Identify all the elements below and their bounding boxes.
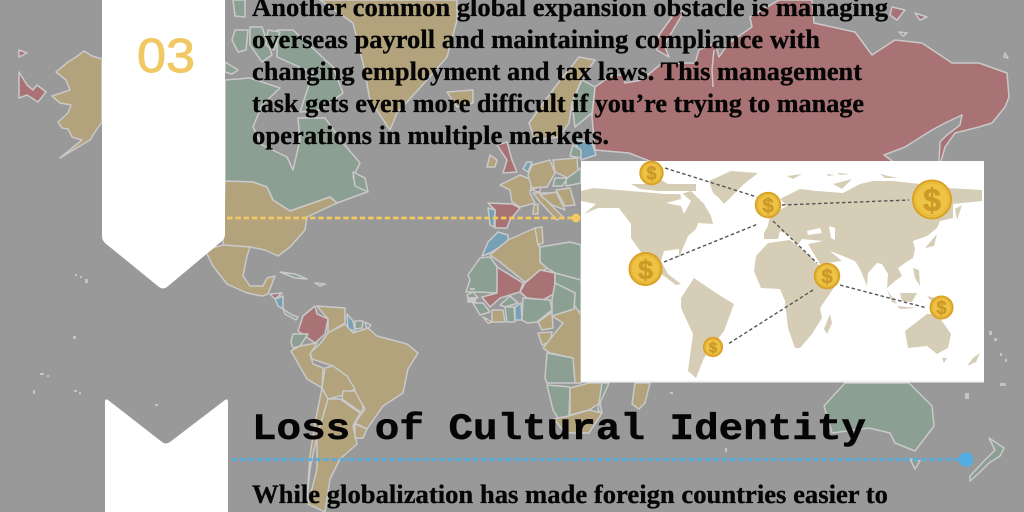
map: Australia and New Zealand bbox=[824, 383, 1004, 481]
yellow dashed connector bbox=[227, 214, 580, 222]
heading: Loss of Cultural Identity: Loss of Cultural Identity bbox=[252, 409, 866, 451]
section 03 body text: task gets even more difficult if you’re trying to manage bbox=[252, 89, 864, 118]
coin: Canada bbox=[640, 162, 663, 184]
panel map: inland seas bbox=[666, 191, 835, 240]
number 03: 03 bbox=[137, 30, 195, 83]
map: North Africa bbox=[466, 227, 581, 312]
section 03 body text: overseas payroll and maintaining compliance with bbox=[252, 25, 821, 54]
map: Greenland and Iceland bbox=[320, 0, 473, 130]
section 03 body text: operations in multiple markets. bbox=[252, 121, 609, 150]
map: Alaska and Chukotka bbox=[19, 50, 102, 158]
panel map: landmasses bbox=[581, 171, 982, 378]
coin: Russia: $ bbox=[923, 182, 941, 218]
blue dashed connector bbox=[232, 452, 973, 467]
map: Central America and Caribbean bbox=[270, 272, 325, 320]
map: Southern Africa and Madagascar bbox=[547, 383, 650, 433]
map: West and Central Africa bbox=[467, 283, 581, 383]
map: Russia bbox=[592, 0, 1009, 165]
coin: Russia bbox=[913, 180, 951, 218]
coin: Indonesia: $ bbox=[936, 298, 947, 318]
coin: East Africa bbox=[815, 264, 839, 288]
section 04 body text: While globalization has made foreign countries easier to bbox=[252, 480, 888, 509]
coin: South America bbox=[704, 338, 722, 356]
coin: Europe: $ bbox=[762, 196, 774, 218]
white pin: section 04 bbox=[105, 399, 228, 512]
section 03 body text: changing employment and tax laws. This management bbox=[252, 57, 862, 86]
coin: Mexico: $ bbox=[638, 255, 653, 285]
white pin: section 03 bbox=[102, 0, 225, 288]
section 03 body text bbox=[252, 0, 888, 150]
map: South America bbox=[291, 306, 418, 512]
map: Canada bbox=[225, 0, 368, 211]
panel map: dashed trade routes bbox=[664, 168, 927, 344]
map: scattered Pacific islands bbox=[33, 274, 1007, 452]
map: USA and Mexico bbox=[205, 181, 337, 296]
map: Europe bbox=[487, 57, 596, 228]
coin: East Africa: $ bbox=[821, 266, 833, 288]
map image panel with coins bbox=[581, 161, 984, 382]
coin: Mexico bbox=[630, 253, 662, 285]
coin: Indonesia bbox=[930, 296, 953, 319]
coin: Canada: $ bbox=[646, 164, 657, 184]
coin: South America: $ bbox=[709, 340, 718, 356]
coin: Europe bbox=[756, 193, 780, 218]
